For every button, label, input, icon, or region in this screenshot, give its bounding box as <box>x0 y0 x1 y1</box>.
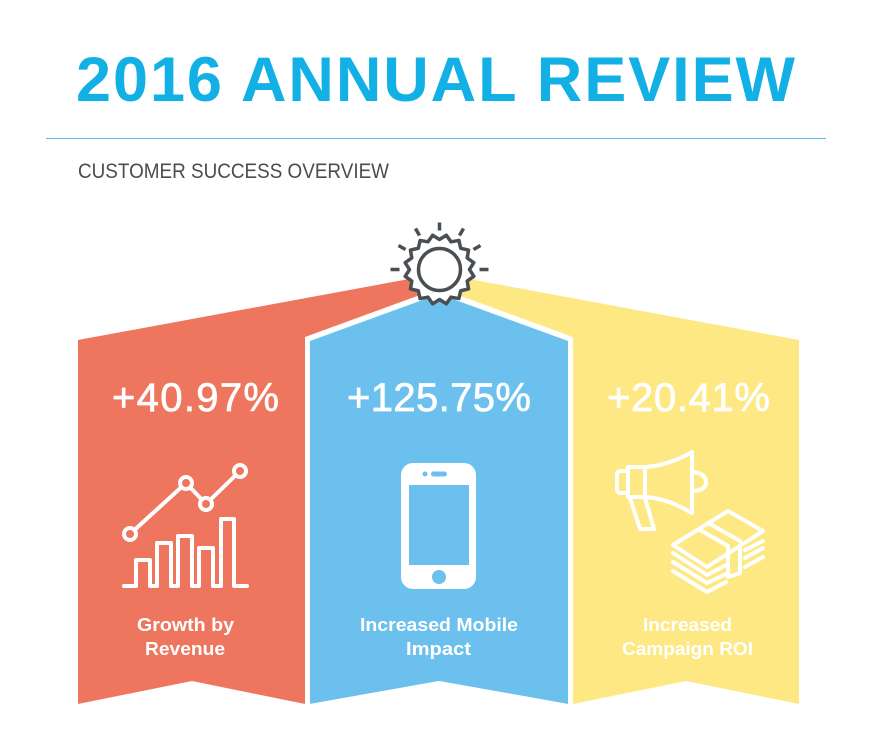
icon: smartphone <box>401 463 476 589</box>
ROI percentage: +20.41% <box>607 376 770 420</box>
revenue label: Revenue <box>145 638 225 659</box>
ROI label: Campaign ROI <box>622 638 753 659</box>
icon: megaphone <box>617 452 706 529</box>
blue banner shape <box>310 294 568 704</box>
icon: gear with sun rays <box>390 222 488 311</box>
red banner shape <box>78 277 439 704</box>
yellow banner shape <box>439 277 799 704</box>
ROI label: Increased <box>643 614 732 635</box>
panel: revenue growth <box>78 277 439 704</box>
panel: campaign ROI <box>439 277 799 704</box>
revenue percentage: +40.97% <box>112 376 279 420</box>
panel: mobile impact <box>305 288 573 731</box>
mobile label: Increased Mobile <box>360 614 518 635</box>
title: 2016 ANNUAL REVIEW <box>76 45 796 115</box>
revenue label: Growth by <box>137 614 235 635</box>
icon: growth chart <box>124 465 247 586</box>
mobile percentage: +125.75% <box>347 376 531 420</box>
icon: stack of money <box>673 511 763 592</box>
mobile label: Impact <box>406 638 471 659</box>
subtitle: CUSTOMER SUCCESS OVERVIEW <box>78 160 389 183</box>
